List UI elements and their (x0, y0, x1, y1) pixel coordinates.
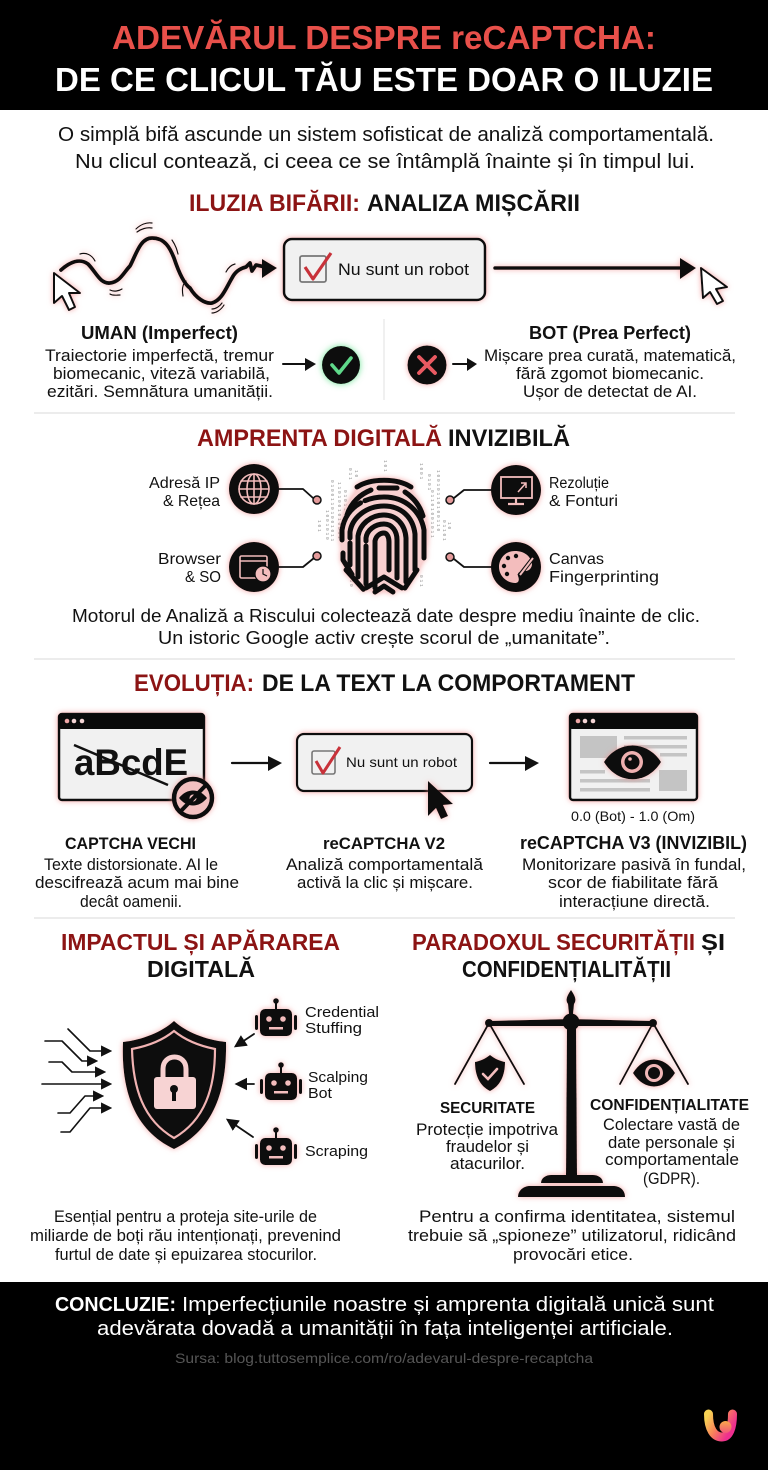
binary digits: 101 (316, 520, 322, 534)
binary digits: 110 (348, 575, 354, 589)
security text: SECURITATE (440, 1100, 535, 1117)
captcha vechi text (35, 834, 239, 911)
binary digits: 1101001010011 (336, 482, 342, 541)
panel: amprenta digitala (72, 424, 700, 648)
label: canvas: Canvas (549, 551, 604, 568)
security text: Protecție impotriva (416, 1120, 559, 1139)
icon: globe (229, 464, 279, 514)
checkbox widget (284, 239, 485, 300)
robot attack arrows (228, 1034, 254, 1137)
title line 1: ADEVĂRUL DESPRE reCAPTCHA: (112, 19, 656, 56)
heading: amprenta: AMPRENTA DIGITALĂ (197, 424, 442, 452)
impact text (30, 1207, 341, 1264)
source: Sursa: blog.tuttosemplice.com/ro/adevarul-despre-recaptcha (175, 1350, 593, 1366)
header band (0, 0, 768, 110)
connector: browser (279, 552, 321, 567)
bot text: BOT (Prea Perfect) (529, 323, 691, 343)
invisible v3 window (570, 714, 697, 800)
label: browser (158, 551, 222, 586)
binary digits: 10 (353, 470, 359, 479)
risk engine text: Motorul de Analiză a Riscului colectează date despre mediu înainte de clic. (72, 606, 700, 626)
bot text: Ușor de detectat de AI. (523, 382, 697, 401)
bot text (484, 323, 736, 401)
label: rezolutie: & Fonturi (549, 493, 618, 510)
heading: impact (61, 928, 340, 982)
icon: eye (604, 746, 661, 779)
impact text: furtul de date și epuizarea stocurilor. (55, 1245, 317, 1264)
heading: evolutia: EVOLUȚIA: (134, 670, 254, 697)
heading: iluzia bifarii: ILUZIA BIFĂRII: (189, 189, 360, 217)
human text: biomecanic, viteză variabilă, (53, 364, 270, 383)
privacy text: Colectare vastă de (603, 1116, 740, 1134)
binary digits: 01011010100 (342, 490, 348, 540)
captcha vechi text: decât oamenii. (80, 893, 182, 911)
label: rezolutie (549, 475, 618, 510)
padlock (154, 1057, 196, 1109)
captcha vechi text: CAPTCHA VECHI (65, 834, 196, 853)
recaptcha v3 text (520, 833, 747, 911)
checkbox label: Nu sunt un robot (338, 260, 469, 279)
arrow 2 (490, 756, 539, 771)
binary digits: 011 (418, 575, 424, 589)
risk engine text (72, 606, 700, 648)
binary digits (316, 460, 452, 589)
binary digits: 10010110100110 (435, 470, 441, 533)
conclusion: adevărata dovadă a umanității în fața inteligenței artificiale. (97, 1318, 673, 1340)
privacy text: comportamentale (605, 1151, 739, 1169)
binary digits: 10 (446, 522, 452, 531)
human text: UMAN (Imperfect) (81, 323, 238, 343)
bot text: Mișcare prea curată, matematică, (484, 346, 736, 365)
cursor v2 (428, 781, 453, 819)
binary digits: 01101001011 (429, 490, 435, 540)
label: adresa IP: & Rețea (163, 493, 220, 510)
connector: palette (446, 553, 491, 567)
binary digits: 01101 (441, 520, 447, 543)
label: adresa IP (149, 475, 220, 510)
heading: impact: IMPACTUL ȘI APĂRAREA (61, 928, 340, 956)
label: canvas: Fingerprinting (549, 569, 659, 586)
recaptcha v2 text: reCAPTCHA V2 (323, 834, 445, 853)
conclusion: Imperfecțiunile noastre și amprenta digitală unică sunt (182, 1294, 714, 1316)
arrow to check (283, 358, 316, 371)
recaptcha v2 text (286, 834, 484, 892)
human text (45, 323, 274, 401)
robot 1 (255, 998, 297, 1036)
captcha vechi text: Texte distorsionate. AI le (44, 856, 218, 874)
heading: paradox: CONFIDENȚIALITĂȚII (462, 955, 671, 982)
label: browser: & SO (185, 569, 221, 586)
panel: evolutia (35, 670, 747, 911)
icon: browser and clock (229, 542, 279, 592)
privacy text: CONFIDENȚIALITATE (590, 1097, 749, 1114)
incoming traffic arrows (42, 1029, 110, 1132)
privacy text: (GDPR). (643, 1170, 700, 1188)
risk engine text: Un istoric Google activ crește scorul de „umanitate”. (158, 628, 610, 648)
binary digits: 01001101001011 (329, 480, 335, 543)
conclusion (55, 1294, 714, 1340)
label: browser: Browser (158, 551, 222, 568)
heading: paradox: PARADOXUL SECURITĂȚII (412, 928, 695, 955)
heading: iluzia bifarii (189, 189, 580, 217)
privacy text: date personale și (608, 1134, 735, 1152)
connector: monitor (446, 490, 491, 504)
icon: red cross (408, 346, 446, 384)
captcha vechi text: descifrează acum mai bine (35, 873, 239, 892)
arrow 1 (232, 756, 282, 771)
fingerprint (340, 478, 428, 592)
recaptcha v3 text: interacțiune directă. (559, 892, 710, 911)
security text: fraudelor și (446, 1137, 529, 1156)
label: rezolutie: Rezoluție (549, 475, 609, 492)
intro text (58, 124, 714, 173)
icon: monitor (491, 465, 541, 515)
icon: eye off (174, 779, 212, 817)
heading: amprenta: INVIZIBILĂ (448, 424, 570, 452)
cursor: bot (701, 268, 727, 304)
logo (708, 1414, 732, 1437)
intro text: Nu clicul contează, ci ceea ce se întâmplă înainte și în timpul lui. (75, 151, 695, 173)
security text (416, 1100, 559, 1173)
bot straight arrow (495, 258, 696, 279)
icon: palette (491, 542, 541, 592)
panel: paradox (408, 928, 749, 1264)
icon: security shield (475, 1055, 505, 1091)
binary digits: 101 (382, 460, 388, 474)
old captcha window (59, 714, 212, 817)
binary digits: 011 (347, 468, 353, 482)
panel: iluzia bifarii (45, 189, 736, 401)
label v2: Nu sunt un robot (346, 754, 457, 770)
human mouse trajectory (61, 223, 277, 313)
shield with padlock (123, 1021, 226, 1149)
recaptcha v2 text: activă la clic și mișcare. (297, 873, 473, 892)
impact text: miliarde de boți rău intenționați, prevenind (30, 1226, 341, 1245)
security text: atacurilor. (450, 1154, 525, 1173)
footer band (0, 1282, 768, 1470)
title line 2: DE CE CLICUL TĂU ESTE DOAR O ILUZIE (55, 61, 713, 98)
heading: paradox (412, 928, 725, 982)
heading: impact: DIGITALĂ (147, 955, 255, 982)
robot labels: Stuffing (305, 1020, 362, 1037)
checkbox (300, 253, 331, 282)
recaptcha v2 widget (297, 734, 472, 819)
checkbox v2 (312, 747, 340, 774)
intro text: O simplă bifă ascunde un sistem sofisticat de analiză comportamentală. (58, 124, 714, 146)
paradox text (408, 1207, 736, 1264)
panel: impact (30, 928, 379, 1264)
cursor: human (54, 273, 80, 310)
balance scale (455, 990, 688, 1197)
paradox text: Pentru a confirma identitatea, sistemul (419, 1207, 735, 1226)
recaptcha v3 text: reCAPTCHA V3 (INVIZIBIL) (520, 833, 747, 853)
binary digits: 1001010 (324, 510, 330, 542)
robot labels: Bot (308, 1085, 333, 1102)
recaptcha v3 text: scor de fiabilitate fără (548, 873, 719, 892)
paradox text: trebuie să „spioneze” utilizatorul, ridicând (408, 1226, 736, 1245)
impact text: Esențial pentru a proteja site-urile de (54, 1207, 317, 1226)
distorted text: aBcdE (74, 742, 188, 783)
paradox text: provocări etice. (513, 1245, 633, 1264)
robot 3 (255, 1127, 297, 1165)
human text: Traiectorie imperfectă, tremur (45, 346, 274, 365)
arrow from cross (453, 358, 477, 371)
score label: 0.0 (Bot) - 1.0 (Om) (571, 808, 695, 824)
heading: amprenta (197, 424, 570, 452)
binary digits: 1001 (418, 463, 424, 481)
icon: privacy eye (633, 1060, 675, 1086)
icon: green check (322, 346, 360, 384)
robot labels: Scalping (308, 1069, 368, 1086)
robot labels: Credential (305, 1004, 379, 1021)
recaptcha v3 text: Monitorizare pasivă în fundal, (522, 855, 746, 874)
bot text: fără zgomot biomecanic. (516, 364, 704, 383)
label: canvas (549, 551, 659, 586)
conclusion: CONCLUZIE: (55, 1294, 176, 1316)
recaptcha v2 text: Analiză comportamentală (286, 855, 484, 874)
label: adresa IP: Adresă IP (149, 475, 220, 492)
binary digits: 0101 (426, 474, 432, 492)
heading: iluzia bifarii: ANALIZA MIȘCĂRII (367, 189, 580, 217)
robot labels (305, 1004, 379, 1160)
privacy text (590, 1097, 749, 1188)
human text: ezitări. Semnătura umanității. (47, 382, 273, 401)
heading: paradox: ȘI (701, 929, 725, 956)
heading: evolutia: DE LA TEXT LA COMPORTAMENT (262, 670, 635, 697)
connector: globe (279, 489, 321, 504)
robot 2 (260, 1062, 302, 1100)
robot labels: Scraping (305, 1143, 368, 1160)
